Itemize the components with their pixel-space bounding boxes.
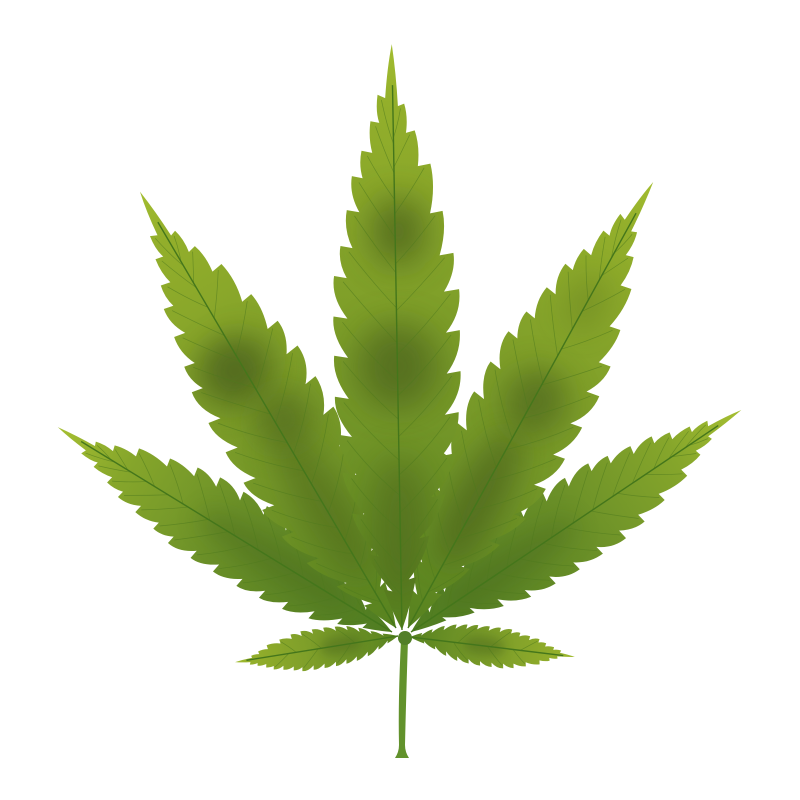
stem <box>395 640 409 758</box>
leaflet: upper right <box>407 182 654 628</box>
small leaflet: bottom left <box>235 626 398 672</box>
leaflet: center <box>328 43 465 631</box>
leaflet: lower right <box>410 410 742 633</box>
leaflet: lower left <box>58 427 392 633</box>
small leaflet: bottom right <box>412 624 575 668</box>
hub where leaflets meet <box>398 631 412 645</box>
leaflet: upper left <box>140 192 397 628</box>
